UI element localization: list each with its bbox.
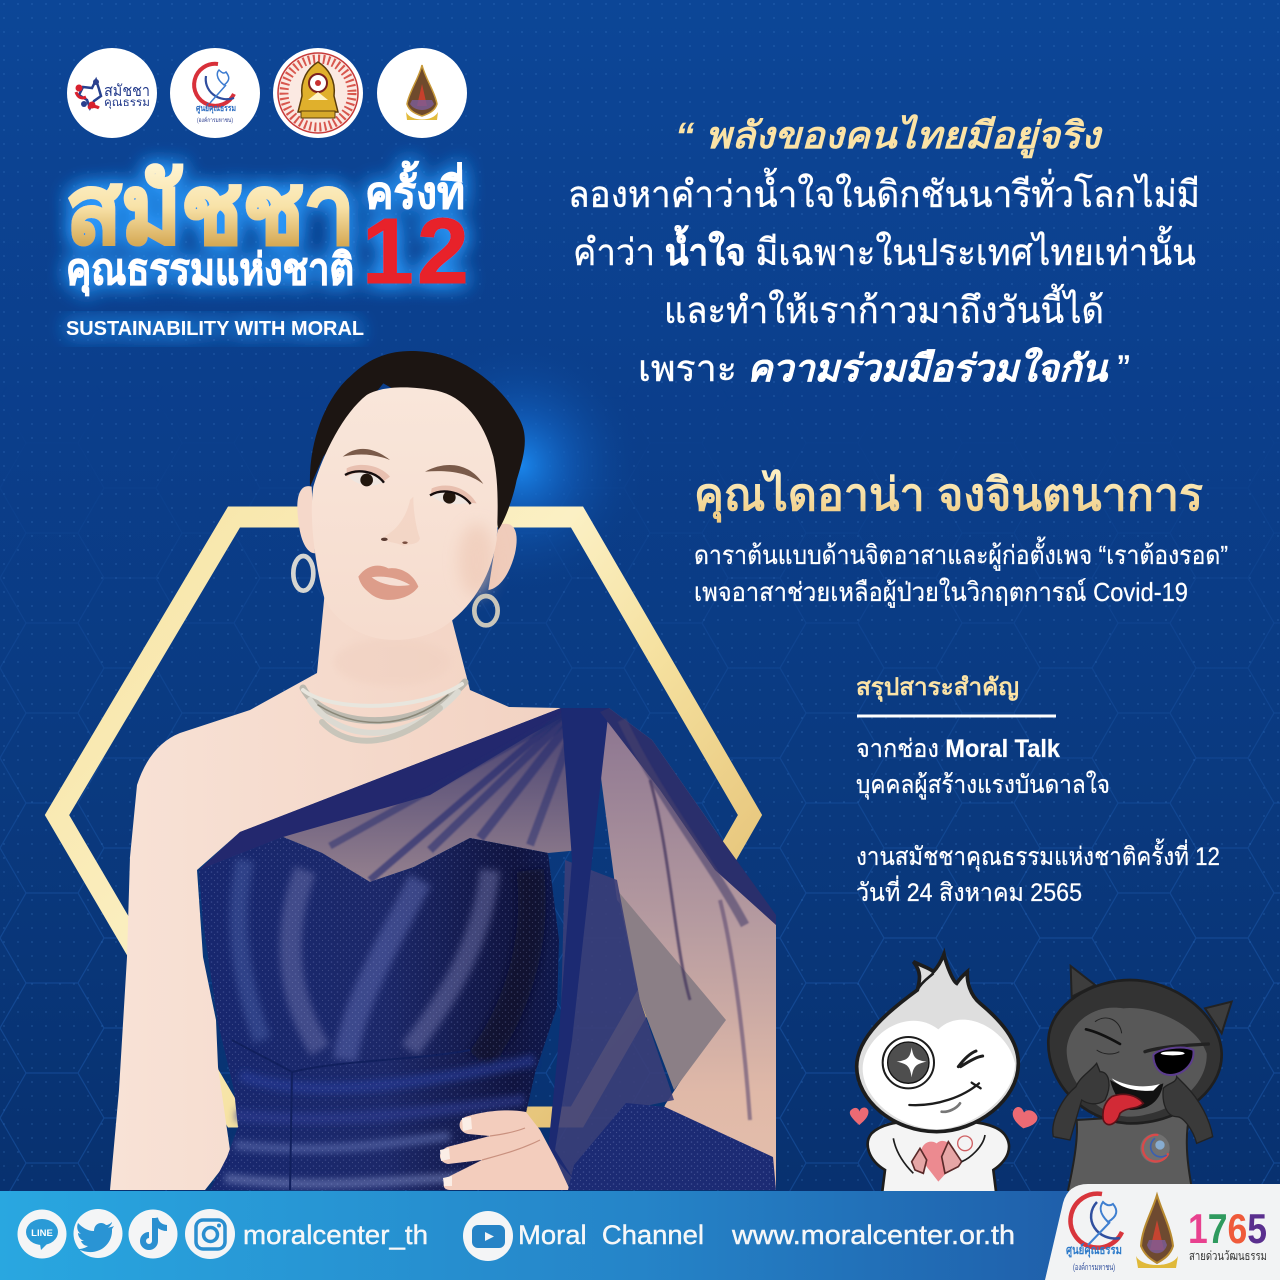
icon: twitter	[74, 1209, 122, 1258]
logo: culture ministry seal	[1136, 1195, 1178, 1268]
speaker description	[694, 536, 1228, 608]
arm through sleeve	[600, 708, 776, 1190]
hair	[310, 351, 525, 530]
speaker description: เพจอาสาช่วยเหลือผู้ป่วยในวิกฤตการณ์ Covid-19	[694, 577, 1188, 608]
heart hands	[921, 1141, 957, 1182]
logo: moral center	[170, 48, 260, 138]
logo: moral center: ศูนย์คุณธรรม	[1066, 1243, 1122, 1258]
logo: moral center: (องค์การมหาชน)	[1073, 1261, 1115, 1272]
quote line 3: คำว่า น้ำใจ มีเฉพาะในประเทศไทยเท่านั้น	[573, 225, 1196, 273]
icon: youtube	[463, 1211, 513, 1261]
mascot: white character	[850, 954, 1037, 1197]
summary body: จากช่อง Moral Talk	[856, 735, 1060, 763]
closed eye	[1086, 1029, 1120, 1044]
wink	[958, 1051, 983, 1067]
body	[1067, 1113, 1193, 1197]
waist seam	[232, 1040, 470, 1190]
icon: instagram	[185, 1209, 235, 1259]
head	[1048, 980, 1222, 1123]
tulle band	[199, 708, 572, 870]
summary body: งานสมัชชาคุณธรรมแห่งชาติครั้งที่ 12	[856, 838, 1220, 872]
head	[293, 351, 525, 640]
summary body: วันที่ 24 สิงหาคม 2565	[856, 875, 1082, 907]
summary panel	[856, 674, 1220, 907]
grey gap under sleeve	[617, 890, 726, 1090]
nose	[385, 497, 420, 546]
chest logo	[1140, 1134, 1170, 1163]
logo: ministry seal	[273, 48, 363, 138]
horns	[1071, 966, 1095, 997]
logo: samatcha khunnatham: คุณธรรม	[104, 97, 150, 109]
logo: samatcha khunnatham: สมัชชา	[104, 83, 150, 100]
edition label: ครั้งที่	[365, 160, 465, 218]
mascot: black character	[1048, 966, 1232, 1197]
sleeve flare	[568, 1103, 776, 1190]
hearts	[850, 1108, 868, 1125]
hands	[1053, 1063, 1109, 1140]
quote	[568, 114, 1200, 389]
logo: moral center	[1066, 1194, 1122, 1272]
website text: www.moralcenter.or.th	[731, 1220, 1015, 1250]
quote line 2: ลองหาคำว่าน้ำใจในดิกชันนารีทั่วโลกไม่มี	[568, 167, 1200, 215]
eye	[883, 1037, 934, 1088]
bodice sparkle	[199, 837, 570, 1190]
quote line 4: และทำให้เราก้าวมาถึงวันนี้ได้	[664, 283, 1104, 331]
summary body: บุคคลผู้สร้างแรงบันดาลใจ	[856, 770, 1110, 800]
bodice pleats	[225, 860, 535, 1184]
eye shadow	[347, 465, 477, 503]
edition number: 12	[362, 199, 469, 303]
eyebrows	[343, 449, 390, 460]
quote line 5: เพราะ ความร่วมมือร่วมใจกัน ”	[638, 347, 1130, 389]
eye left	[348, 473, 383, 486]
logo: culture ministry	[377, 48, 467, 138]
partner logo panel	[1045, 1184, 1280, 1280]
icon: line	[18, 1210, 66, 1258]
title: samatcha: สมัชชา	[66, 157, 355, 264]
logo: samatcha khunnatham	[67, 48, 157, 138]
slogan: SUSTAINABILITY WITH MORAL	[66, 318, 364, 340]
face	[312, 387, 498, 640]
open eye	[1145, 1044, 1208, 1052]
channel text: Moral Channel	[518, 1220, 704, 1250]
tongue	[1103, 1094, 1143, 1125]
footer bar	[0, 1191, 1280, 1280]
face patch	[1067, 1008, 1207, 1117]
sheer fabric by waist	[545, 860, 674, 1190]
summary body	[856, 735, 1220, 907]
logo: moral center: ศูนย์คุณธรรม	[196, 102, 236, 114]
sheer chest	[210, 708, 580, 882]
icon: tiktok	[128, 1210, 178, 1258]
neck shadow	[334, 638, 450, 686]
logo row	[67, 48, 467, 138]
earrings	[293, 556, 313, 591]
mouth	[1110, 1080, 1163, 1110]
social icons	[18, 1209, 1015, 1261]
gold hexagon frame	[57, 517, 750, 1117]
quote line 1: “ พลังของคนไทยมีอยู่จริง	[675, 114, 1103, 159]
tulle folds	[330, 712, 576, 880]
necklace	[303, 682, 465, 741]
logo: moral center: (องค์การมหาชน)	[197, 116, 233, 124]
logo: 1765: 1765	[1188, 1205, 1267, 1252]
hand on hip	[440, 1110, 570, 1190]
eye right	[431, 492, 468, 504]
icon: line: LINE	[31, 1228, 53, 1239]
subtitle: national moral: คุณธรรมแห่งชาติ	[66, 246, 354, 297]
bodice	[199, 837, 570, 1190]
title block	[66, 157, 469, 303]
summary heading: สรุปสาระสำคัญ	[856, 674, 1019, 703]
speaker name: คุณไดอาน่า จงจินตนาการ	[694, 468, 1203, 523]
handle text: moralcenter_th	[243, 1220, 428, 1250]
ears	[297, 486, 315, 553]
neck, chest and arm	[110, 590, 561, 1190]
sleeve band	[548, 708, 609, 1180]
smile	[909, 1083, 981, 1105]
person portrait	[110, 351, 776, 1190]
face shade	[458, 523, 495, 597]
lips	[358, 566, 418, 600]
